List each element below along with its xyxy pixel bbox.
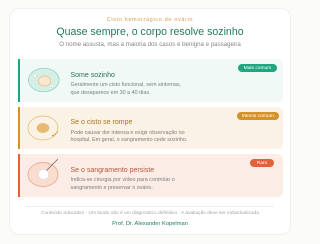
icon: ruptured cyst <box>28 116 58 140</box>
description: sangramento e preservar o ovário. <box>70 185 153 191</box>
title: Quase sempre, o corpo resolve sozinho <box>56 26 244 38</box>
icon: ovary with cyst <box>28 68 60 92</box>
disclaimer: Conteúdo educativo · Um laudo não é um diagnóstico definitivo · A avaliação deve ser individualizada <box>41 211 259 216</box>
badge: Mais comum <box>244 66 271 71</box>
eyebrow: Cisto hemorrágico de ovário <box>107 16 193 22</box>
panel: some sozinho <box>18 59 283 102</box>
description: que desaparece em 30 a 40 dias. <box>70 90 151 96</box>
author: Prof. Dr. Alexander Kopelman <box>112 221 188 227</box>
badge <box>236 112 279 120</box>
description <box>70 177 175 191</box>
description <box>70 130 187 143</box>
description: Pode causar dor intensa e exigir observação no <box>70 130 185 136</box>
badge: Menos comum <box>242 114 274 119</box>
heading: Se o sangramento persiste <box>70 167 154 174</box>
panel: se o cisto se rompe <box>18 106 283 149</box>
badge <box>250 159 274 167</box>
heading: Some sozinho <box>70 72 115 79</box>
panel: se o sangramento persiste <box>18 154 283 196</box>
description: Geralmente um cisto funcional, sem sintomas, <box>70 82 181 88</box>
heading: Se o cisto se rompe <box>70 119 132 126</box>
description: hospital. Em geral, o sangramento cede sozinho. <box>70 137 187 143</box>
description <box>70 82 181 96</box>
description: Indica-se cirurgia por vídeo para controlar o <box>70 177 175 183</box>
subtitle: O nome assusta, mas a maioria dos casos é benigna e passageira <box>59 41 241 48</box>
badge <box>238 64 277 72</box>
icon: laparoscopy <box>28 158 58 187</box>
badge: Raro <box>257 161 267 166</box>
